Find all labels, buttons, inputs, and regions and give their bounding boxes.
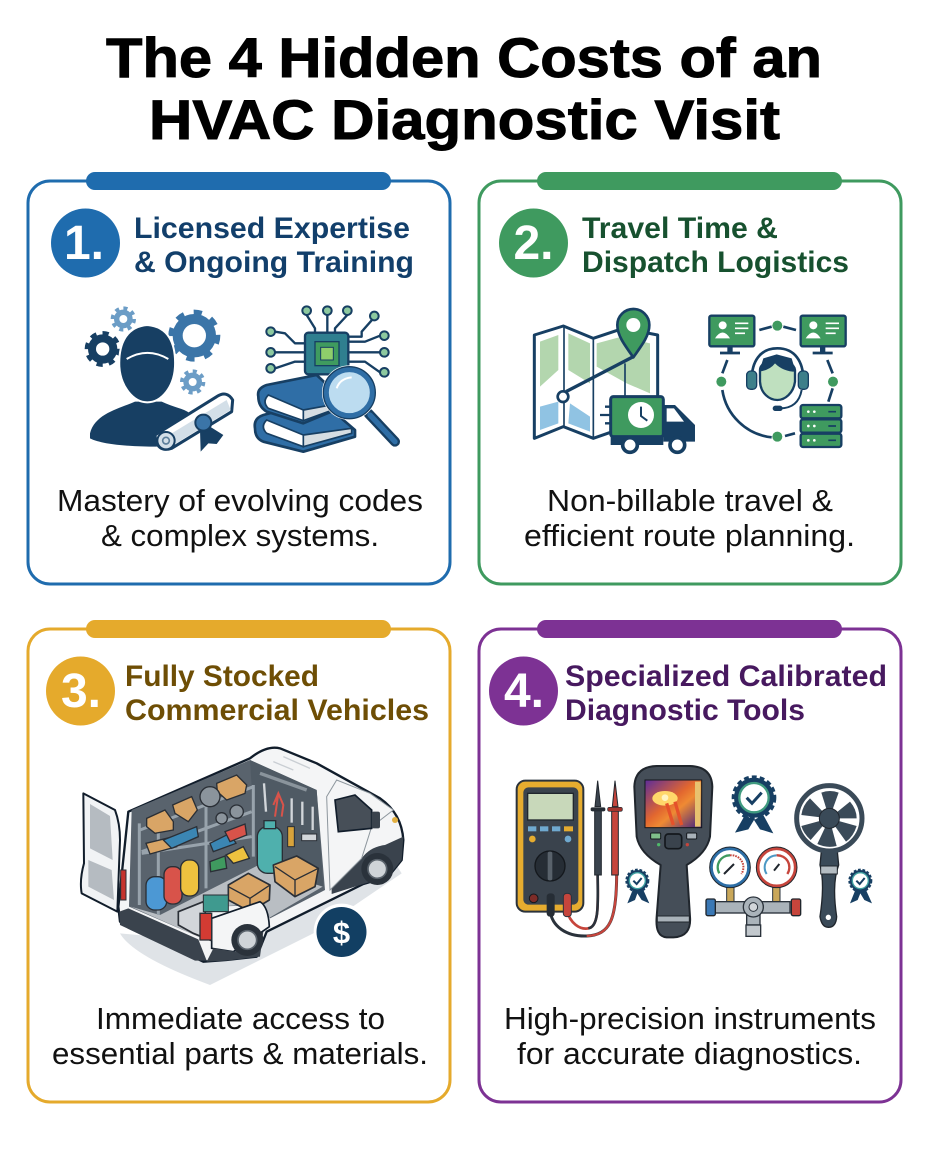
panel: stocked vehicles bbox=[28, 620, 450, 1102]
body text 3: Immediate access to bbox=[96, 1001, 385, 1036]
icon: chip, books and magnifier bbox=[255, 306, 395, 452]
number badge 1: 1. bbox=[64, 217, 104, 270]
heading 4 bbox=[565, 660, 887, 727]
icon: manifold gauges bbox=[706, 847, 801, 936]
icon: technician with gears and diploma bbox=[87, 308, 233, 452]
icon: thermal camera bbox=[634, 766, 712, 937]
body text 3: essential parts & materials. bbox=[52, 1036, 428, 1071]
heading 2: Dispatch Logistics bbox=[582, 246, 849, 279]
heading 3: Fully Stocked bbox=[125, 660, 319, 693]
panel: travel time bbox=[479, 172, 901, 584]
heading 1 bbox=[134, 212, 414, 279]
icon: dollar coin: $ bbox=[333, 915, 350, 950]
body text 2: Non-billable travel & bbox=[547, 483, 833, 518]
heading 1: Licensed Expertise bbox=[134, 212, 410, 245]
body text 4: High-precision instruments bbox=[504, 1001, 876, 1036]
icon: dispatcher network bbox=[709, 316, 846, 447]
number badge 4 bbox=[489, 656, 558, 726]
title: HVAC Diagnostic Visit bbox=[149, 88, 780, 151]
icon: map with pin and truck bbox=[534, 309, 695, 452]
body text 4 bbox=[504, 1001, 876, 1071]
heading 2: Travel Time & bbox=[582, 212, 778, 245]
icon: stocked service van bbox=[81, 748, 403, 985]
heading 3: Commercial Vehicles bbox=[125, 694, 429, 727]
icon: anemometer bbox=[797, 786, 862, 927]
number badge 1 bbox=[51, 208, 120, 278]
heading 1: & Ongoing Training bbox=[134, 246, 414, 279]
number badge 3: 3. bbox=[61, 665, 101, 718]
heading 4: Specialized Calibrated bbox=[565, 660, 887, 693]
number badge 4: 4. bbox=[504, 665, 544, 718]
body text 4: for accurate diagnostics. bbox=[517, 1036, 862, 1071]
panel: diagnostic tools bbox=[479, 620, 901, 1102]
body text 1: Mastery of evolving codes bbox=[57, 483, 423, 518]
heading 3 bbox=[125, 660, 429, 727]
title: The 4 Hidden Costs of an bbox=[106, 26, 822, 89]
body text 1 bbox=[57, 483, 423, 553]
body text 2: efficient route planning. bbox=[524, 518, 855, 553]
number badge 2 bbox=[499, 208, 568, 278]
heading 4: Diagnostic Tools bbox=[565, 694, 805, 727]
number badge 3 bbox=[46, 656, 115, 726]
icon: dollar coin bbox=[316, 907, 366, 957]
panel: licensed expertise bbox=[28, 172, 450, 584]
body text 1: & complex systems. bbox=[101, 518, 379, 553]
icon: multimeter bbox=[517, 781, 622, 936]
number badge 2: 2. bbox=[513, 217, 554, 270]
heading 2 bbox=[582, 212, 849, 279]
icon: calibration badges bbox=[627, 778, 872, 903]
body text 2 bbox=[524, 483, 855, 553]
title bbox=[106, 26, 822, 151]
body text 3 bbox=[52, 1001, 428, 1071]
